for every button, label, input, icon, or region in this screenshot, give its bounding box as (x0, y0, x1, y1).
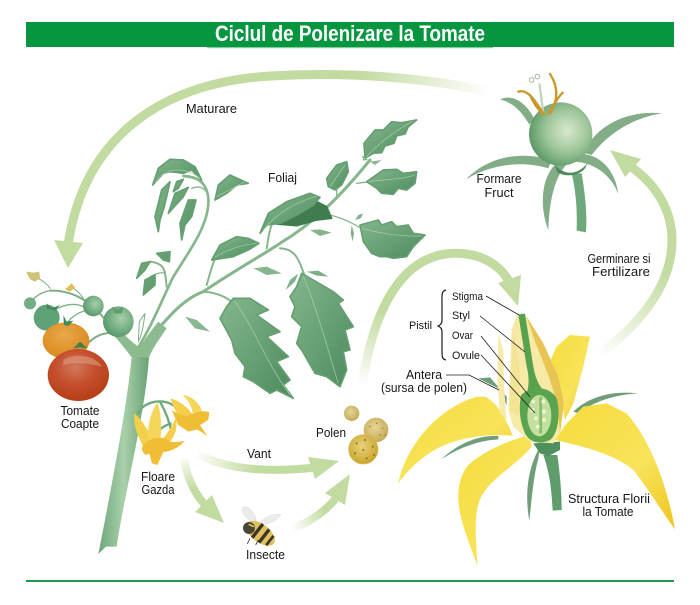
label: ovar: Ovar (452, 330, 473, 342)
icon: bee (242, 507, 281, 551)
leader lines (446, 296, 535, 413)
pollen grains (344, 406, 388, 464)
arrow: germinare si fertilizare (598, 150, 672, 355)
pollen: small (344, 406, 359, 421)
bottom rule (26, 580, 674, 582)
label: floare gazda: Floare (141, 470, 175, 484)
label: structura florii: Structura Florii (568, 492, 650, 506)
label: tomate coapte: Coapte (61, 417, 99, 431)
arrow: polen to flower (362, 253, 521, 385)
label: styl: Styl (452, 310, 470, 322)
label: stigma: Stigma (452, 291, 484, 303)
leaf: right middle (360, 220, 425, 258)
label: germinare si fertilizare: Fertilizare (592, 265, 650, 279)
stamen cone (497, 315, 564, 443)
unripe tomatoes (24, 296, 134, 337)
host flowers (134, 395, 209, 465)
label: formare fruct (476, 172, 522, 200)
orange tomato (43, 322, 89, 359)
arrow: vant (196, 453, 339, 479)
leaf: lower centre (220, 298, 293, 398)
leaf: top (364, 120, 417, 158)
tomato calyxes and buds (26, 272, 75, 326)
petal: front (458, 435, 532, 566)
pistil (518, 314, 559, 443)
title: Ciclul de Polenizare la Tomate (215, 21, 485, 46)
leaf: small upper (327, 162, 348, 190)
tomato plant main stem (24, 272, 167, 554)
label: ovule: Ovule (452, 350, 480, 362)
label: antera: (sursa de polen) (381, 381, 467, 395)
label: antera (381, 368, 467, 395)
fruit stem (572, 173, 586, 232)
young fruit (466, 74, 662, 232)
label: structura florii: la Tomate (582, 505, 634, 519)
label: germinare si fertilizare: Germinare si (588, 252, 650, 266)
label: foliaj: Foliaj (268, 171, 297, 185)
label: antera: Antera (406, 368, 442, 382)
flower sepals and stem (442, 377, 638, 521)
petal: right (555, 403, 675, 529)
leaf: top-left drooping (153, 159, 202, 185)
petal: back right (548, 335, 590, 420)
label: insecte: Insecte (246, 548, 285, 562)
flower: lower (134, 403, 185, 465)
arrow: insecte to polen (292, 474, 350, 529)
pollen: large (349, 435, 378, 464)
leaf: mid branch (212, 237, 259, 260)
label: tomate coapte (60, 404, 100, 431)
label: germinare si fertilizare (588, 252, 650, 279)
label: vant: Vant (247, 447, 272, 461)
label: formare fruct: Formare (476, 172, 522, 186)
flower: upper right (171, 395, 209, 436)
flower cross-section (398, 314, 675, 566)
arrow: maturare (54, 75, 490, 268)
title banner (26, 21, 674, 48)
label: formare fruct: Fruct (484, 186, 514, 200)
leaf: lower right large (290, 273, 353, 387)
leaf: drooping cluster (137, 179, 196, 295)
label: floare gazda (141, 470, 175, 497)
leaf: top-left side (215, 175, 248, 200)
fruit body (529, 102, 592, 166)
label: pistil: Pistil (409, 320, 432, 332)
petal: left (398, 397, 513, 483)
label: maturare: Maturare (186, 102, 237, 116)
fruit style and withered petals (518, 74, 563, 115)
label: structura florii (568, 492, 650, 519)
pollen: medium (364, 418, 388, 442)
leaf: folded underside (277, 202, 332, 226)
red tomato (48, 342, 109, 401)
label: tomate coapte: Tomate (60, 404, 100, 418)
leaf: upper right (367, 169, 417, 194)
fruit sepals (466, 98, 662, 230)
pistil brace (438, 290, 446, 360)
tomato plant foliage (137, 120, 425, 398)
stipules (185, 155, 382, 332)
arrow: floare to insecte (184, 460, 224, 523)
label: floare gazda: Gazda (142, 483, 175, 497)
label: polen: Polen (316, 426, 346, 440)
leaf: folded top (260, 193, 320, 233)
